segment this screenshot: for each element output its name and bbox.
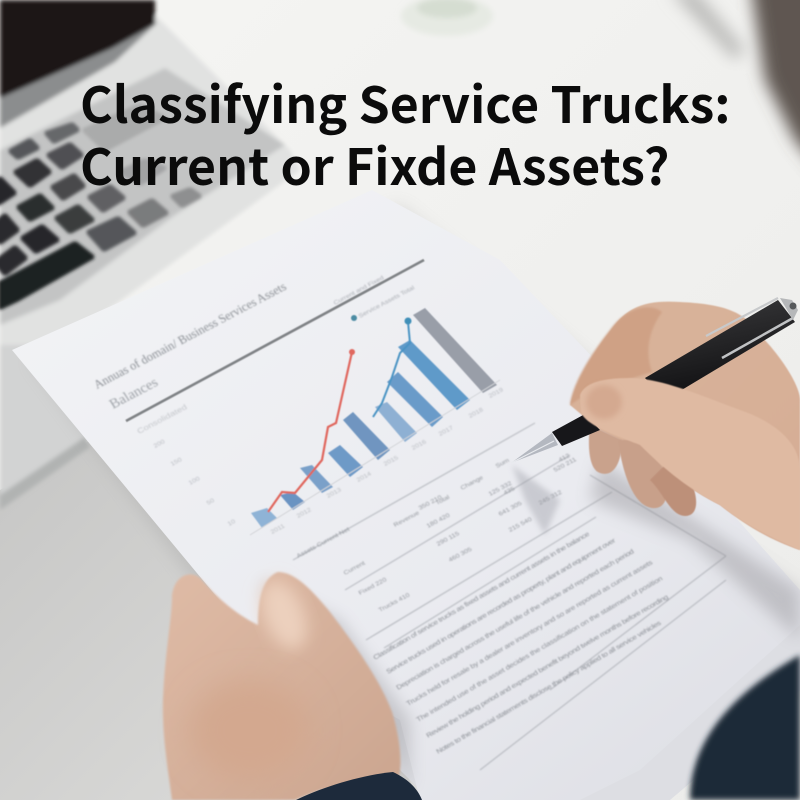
table figures: 180 420	[426, 512, 452, 530]
table figures: 215 540	[508, 516, 534, 534]
pen	[511, 298, 798, 463]
axis labels: 2011	[270, 523, 287, 536]
thumb shade	[586, 385, 622, 419]
lower fingers	[589, 425, 622, 474]
keys	[0, 105, 200, 308]
laptop front edge	[0, 437, 90, 510]
pen clip	[706, 298, 778, 336]
paragraph lines: Classification of service trucks as fixed assets and current assets in the balance	[372, 530, 591, 662]
heading rule	[126, 260, 424, 421]
axis labels: 50	[206, 497, 216, 507]
axis labels: 2018	[468, 407, 485, 420]
chart legend	[351, 315, 357, 321]
table figures: 350 210	[418, 494, 444, 512]
table figures: Current	[343, 560, 367, 577]
laptop body	[0, 15, 300, 345]
back of hand	[570, 302, 800, 550]
left hand holding the document	[163, 572, 422, 800]
hand shadow	[260, 580, 410, 790]
table figures: 245 312	[538, 489, 564, 507]
axis labels: 200	[153, 438, 167, 450]
pen top cap	[780, 298, 798, 320]
table figures: 290 115	[436, 530, 461, 548]
table figures: 641 305	[498, 500, 524, 518]
document heading	[91, 280, 289, 436]
chart legend text: Service Assets Total	[358, 285, 416, 320]
glass on the desk	[401, 0, 493, 36]
axis line	[250, 380, 500, 535]
hand shadow on paper	[590, 460, 800, 640]
index finger	[570, 307, 662, 405]
palm and fingers	[163, 572, 400, 800]
bar chart	[250, 308, 500, 535]
title	[80, 66, 731, 200]
axis labels: 2016	[411, 439, 428, 452]
laptop	[0, 0, 300, 510]
table figures: Revenue	[393, 510, 421, 529]
pen shadow on paper	[512, 465, 560, 535]
table figures: 435	[503, 485, 517, 497]
keyboard area	[0, 68, 285, 325]
table rules	[293, 423, 726, 770]
paragraph lines: The intended use of the asset decides the classification on the statement of position	[415, 574, 664, 724]
axis labels	[153, 387, 505, 536]
laptop screen	[0, 0, 155, 98]
table figures: Trucks 410	[378, 592, 412, 614]
red trend line	[268, 352, 352, 512]
title line 2: Current or Fixde Assets?	[80, 128, 669, 200]
document title text: Annuas of domain/ Business Services Assets	[91, 280, 289, 391]
paragraph lines: Review the holding period and expected benefit beyond twelve months before recording	[425, 593, 670, 740]
right hand writing	[511, 298, 800, 550]
axis labels: 2012	[296, 507, 313, 520]
pen grip	[552, 414, 600, 446]
paragraph lines: Trucks held for resale by a dealer are inventory and so are reported as current assets	[405, 558, 654, 708]
pen tip	[511, 433, 558, 463]
axis labels: 100	[188, 475, 202, 487]
sleeve cuff	[296, 772, 422, 800]
table figures: 125 332	[488, 480, 514, 498]
axis labels: 150	[170, 456, 184, 468]
paragraph lines	[372, 530, 670, 756]
axis labels: 2013	[326, 487, 343, 500]
financial table	[293, 423, 726, 770]
document sheet under	[240, 370, 800, 800]
thumb	[580, 378, 800, 550]
axis labels: 2019	[488, 387, 505, 400]
table figures: Total	[435, 494, 451, 507]
dark sleeve, right	[690, 655, 800, 800]
table figures: Sum	[495, 457, 511, 470]
axis labels: 2015	[383, 455, 400, 468]
laptop lower body	[0, 345, 90, 510]
paper shadow	[30, 205, 800, 800]
table figures	[296, 452, 578, 614]
blue trend line	[373, 322, 410, 417]
thumb highlight	[252, 574, 316, 656]
table figures: Assets Current Net	[296, 526, 351, 560]
laptop hinge	[0, 22, 158, 128]
title line 1: Classifying Service Trucks:	[80, 66, 731, 138]
paragraph lines: Depreciation is charged across the useful life of the vehicle and reported each period	[395, 547, 635, 692]
document page	[12, 190, 800, 800]
palm shading	[190, 680, 310, 780]
table figures: 460 305	[448, 546, 474, 564]
small caption: Consolidated	[136, 403, 189, 436]
table figures: 412	[558, 452, 572, 464]
axis labels: 2014	[356, 471, 373, 484]
chart legend text: Current and Fixed	[333, 275, 386, 307]
chart legend text	[333, 275, 416, 320]
table figures: 520 211	[553, 456, 578, 474]
document subheading: Balances	[107, 375, 161, 412]
table figures: Change	[460, 474, 485, 492]
axis labels: 10	[227, 518, 237, 528]
paragraph lines: Service trucks used in operations are recorded as property, plant and equipment over	[385, 536, 617, 676]
table figures: Fixed 220	[358, 577, 388, 597]
paragraph lines: Notes to the financial statements disclose the policy applied to all service vehicles	[435, 618, 663, 756]
person's head, blurred	[670, 0, 800, 170]
pen barrel	[645, 300, 795, 400]
axis labels: 2017	[438, 425, 455, 438]
